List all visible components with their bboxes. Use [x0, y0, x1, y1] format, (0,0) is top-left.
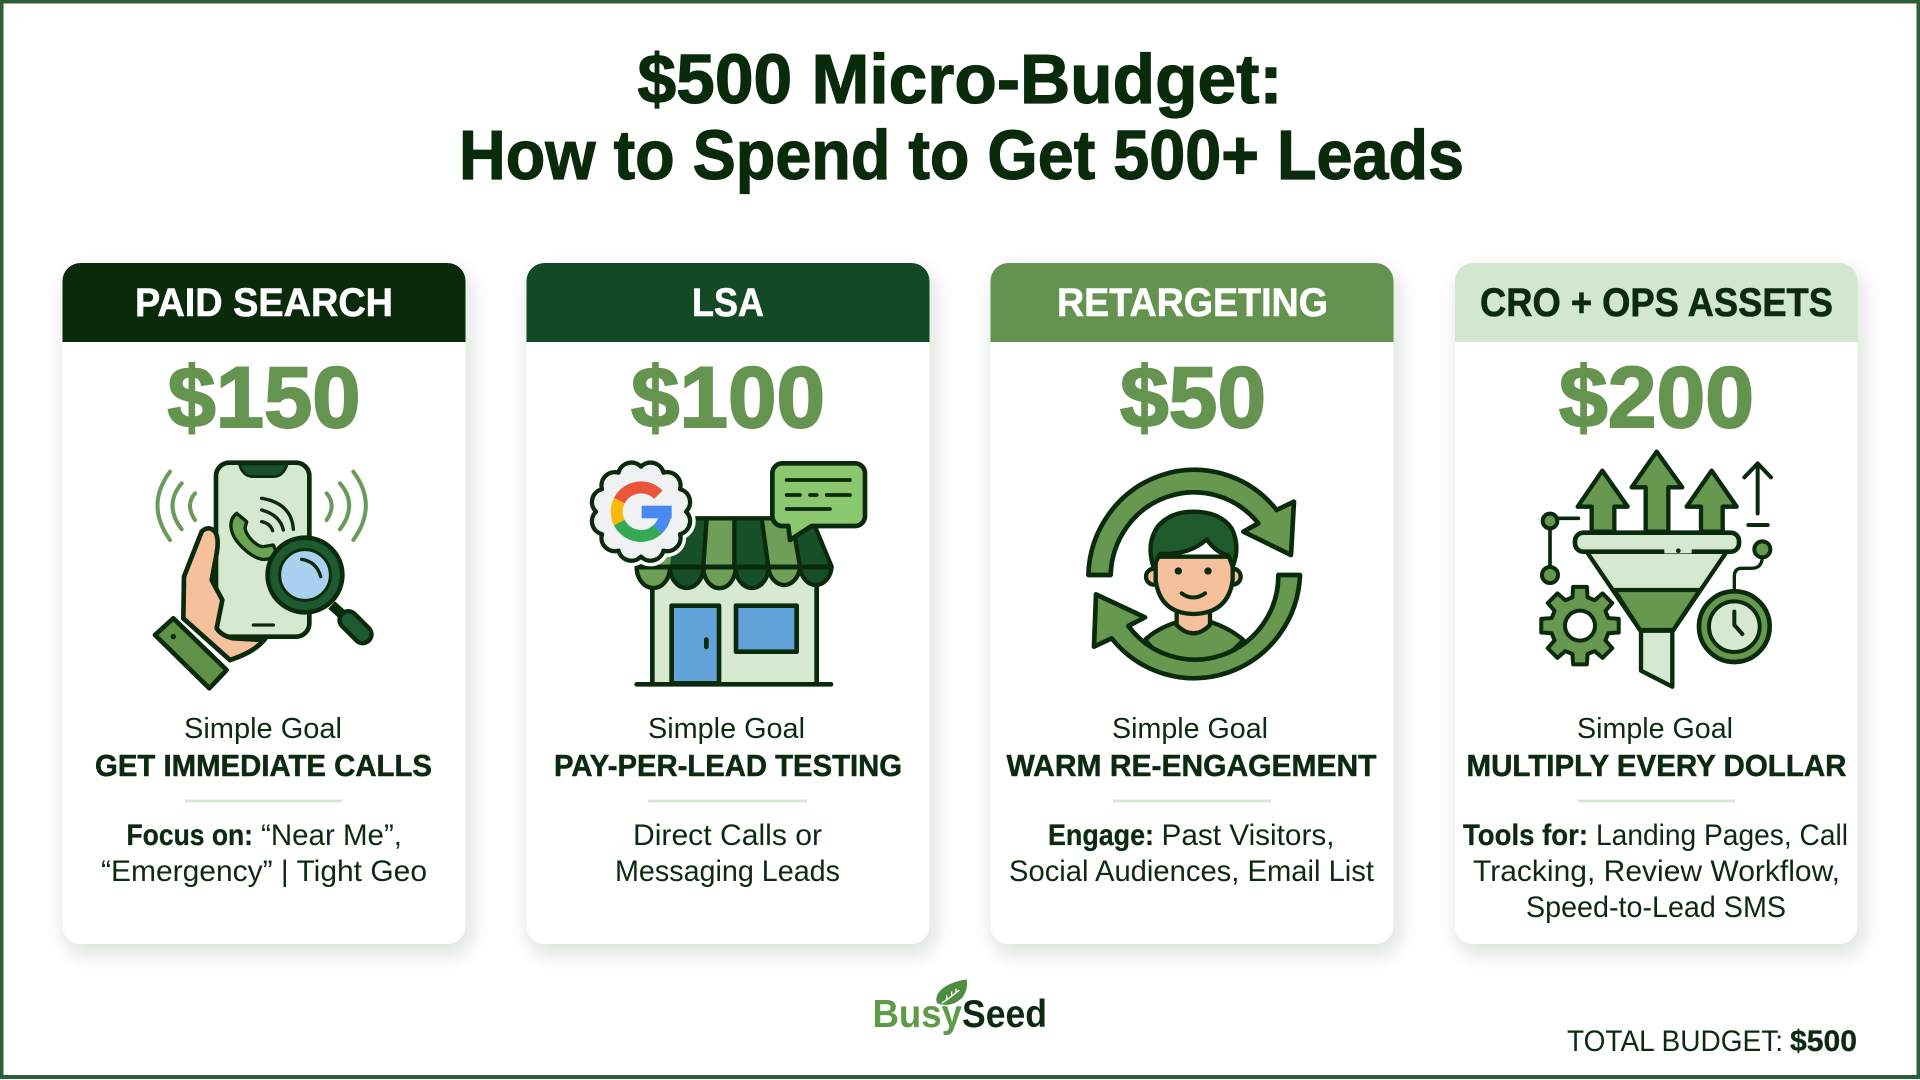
icon: storefront with Google badge and chat bubble	[592, 463, 865, 684]
panel: retargeting	[990, 263, 1394, 944]
description: CRO + ops assets: Tools for:	[1463, 819, 1588, 852]
panel: LSA	[526, 263, 930, 944]
panel: paid search	[62, 263, 466, 944]
description: retargeting	[1009, 819, 1375, 888]
panel: CRO + ops assets	[1455, 263, 1858, 944]
title: How to Spend to Get 500+ Leads	[459, 116, 1464, 194]
logo: BusySeed	[872, 979, 1047, 1036]
goal text: paid search: GET IMMEDIATE CALLS	[95, 748, 432, 783]
goal text: CRO + ops assets: MULTIPLY EVERY DOLLAR	[1466, 748, 1846, 783]
header: paid search: PAID SEARCH	[135, 281, 393, 325]
header: CRO + ops assets: CRO + OPS ASSETS	[1480, 281, 1833, 325]
goal text: retargeting: Simple Goal	[1112, 713, 1268, 745]
amount: $100: $100	[631, 350, 825, 446]
total budget: $500	[1790, 1025, 1857, 1058]
description: retargeting: Engage:	[1048, 819, 1154, 852]
amount: $150: $150	[168, 350, 360, 446]
description: CRO + ops assets	[1463, 819, 1848, 924]
header: LSA: LSA	[692, 281, 764, 325]
description: LSA: Messaging Leads	[615, 855, 840, 888]
goal text: CRO + ops assets	[1466, 713, 1846, 783]
goal text: paid search: Simple Goal	[184, 713, 342, 745]
goal text: LSA: Simple Goal	[648, 713, 805, 745]
description: retargeting: Past Visitors,	[1162, 819, 1334, 852]
icon: phone with magnifier	[155, 463, 366, 688]
logo: BusySeed: Busy	[872, 993, 962, 1036]
description: LSA: Direct Calls or	[633, 819, 822, 852]
icon: person inside circular arrows	[1088, 470, 1300, 678]
header: retargeting: RETARGETING	[1057, 281, 1328, 325]
goal text: paid search	[95, 713, 432, 783]
goal text: CRO + ops assets: Simple Goal	[1577, 713, 1733, 745]
description: LSA	[615, 819, 840, 888]
icon: funnel with arrows, gear and clock	[1541, 452, 1771, 687]
goal text: retargeting	[1006, 713, 1377, 783]
description: paid search	[101, 819, 427, 888]
description: paid search: “Emergency” | Tight Geo	[101, 855, 427, 888]
header: paid search	[62, 263, 466, 342]
goal text: LSA	[554, 713, 902, 783]
description: paid search: Focus on:	[126, 819, 253, 852]
header: LSA	[526, 263, 930, 342]
icon: leaf	[936, 979, 967, 1005]
goal text: retargeting: WARM RE-ENGAGEMENT	[1006, 748, 1377, 783]
description: CRO + ops assets: Tracking, Review Workflow,	[1473, 855, 1840, 888]
header: CRO + ops assets	[1455, 263, 1858, 342]
title: $500 Micro-Budget:	[638, 40, 1282, 118]
amount: $50: $50	[1120, 350, 1266, 446]
description: CRO + ops assets: Speed-to-Lead SMS	[1526, 891, 1786, 924]
description: paid search: “Near Me”,	[261, 819, 402, 852]
total budget: TOTAL BUDGET:	[1567, 1025, 1783, 1058]
logo: BusySeed: Seed	[962, 993, 1047, 1036]
header: retargeting	[990, 263, 1394, 342]
description: retargeting: Social Audiences, Email List	[1009, 855, 1375, 888]
goal text: LSA: PAY-PER-LEAD TESTING	[554, 748, 902, 783]
title	[459, 40, 1464, 194]
amount: $200: $200	[1559, 350, 1754, 446]
description: CRO + ops assets: Landing Pages, Call	[1596, 819, 1848, 852]
